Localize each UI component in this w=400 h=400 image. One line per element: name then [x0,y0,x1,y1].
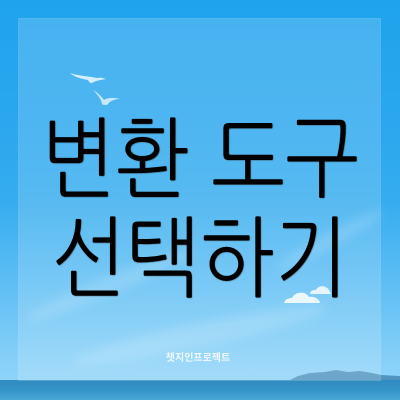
credit text: 챗지인프로젝트 [166,353,230,364]
title line 2: 선택하기 [52,214,348,302]
title line 1: 변환 도구 [41,115,359,203]
icon: seagulls [70,73,120,105]
icon: clouds [284,286,331,303]
